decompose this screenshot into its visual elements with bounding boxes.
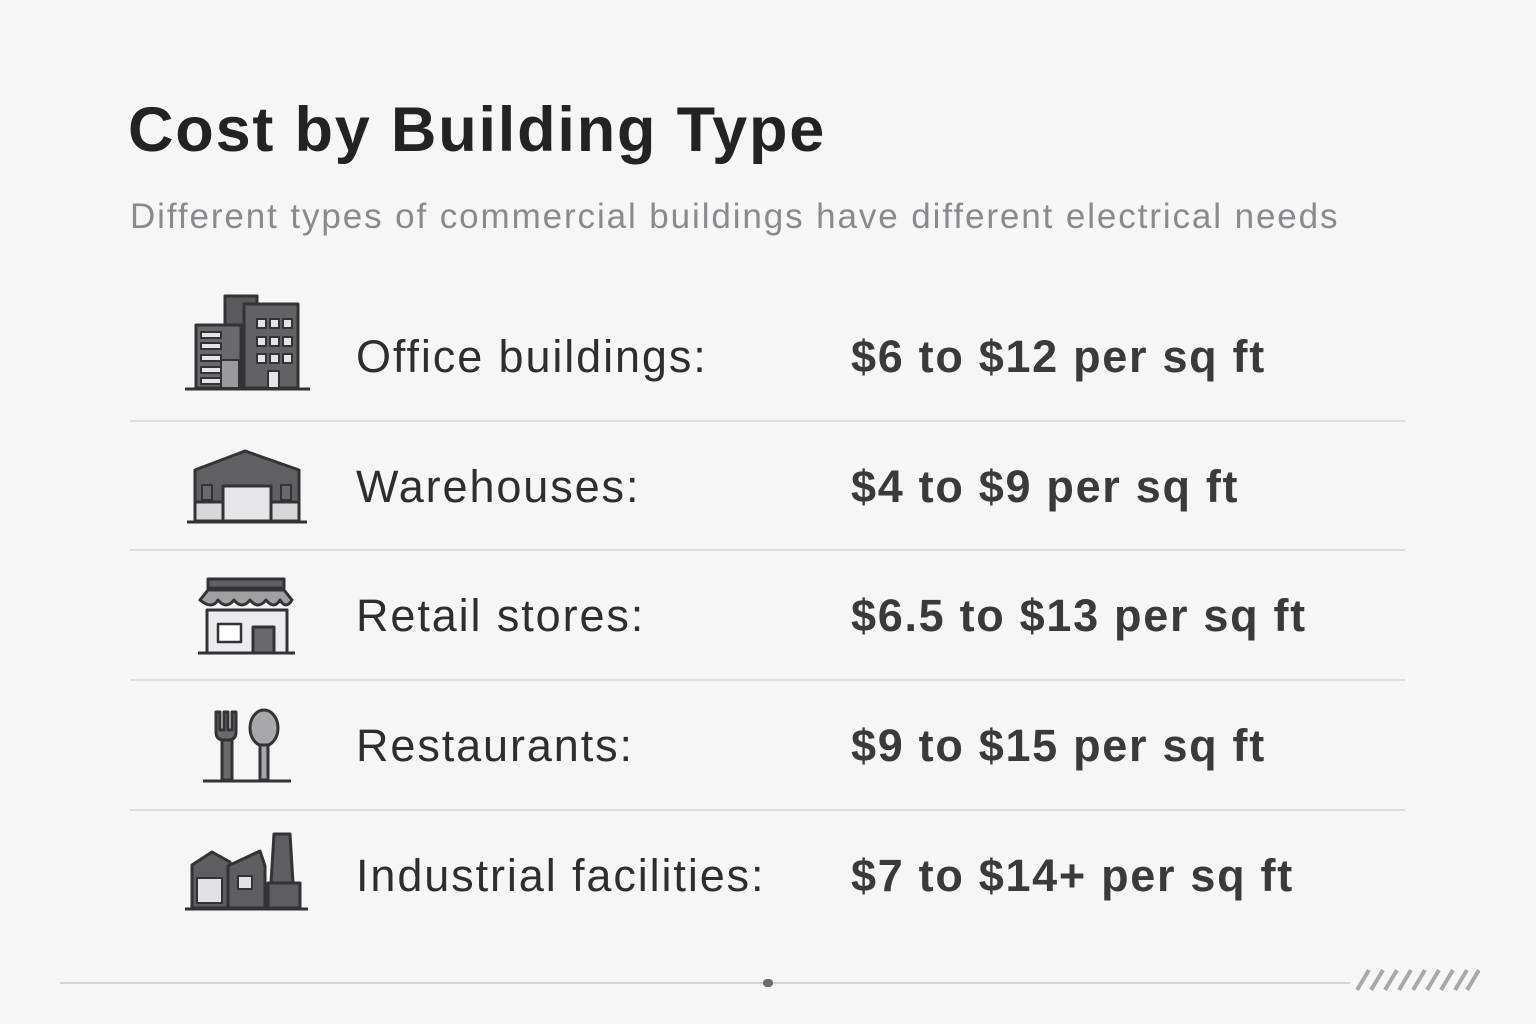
icon: retail store — [198, 579, 295, 653]
subtitle: Different types of commercial buildings have different electrical needs — [130, 197, 1339, 236]
row label: office: Office buildings: — [356, 331, 708, 382]
row price: warehouses: $4 to $9 per sq ft — [851, 461, 1239, 512]
row price: industrial: $7 to $14+ per sq ft — [851, 850, 1294, 901]
row label: industrial: Industrial facilities: — [356, 850, 765, 901]
icon: office building — [185, 296, 310, 389]
row price: retail: $6.5 to $13 per sq ft — [851, 590, 1307, 641]
icon: warehouse — [187, 451, 307, 522]
row label: restaurants: Restaurants: — [356, 720, 634, 771]
footer decoration — [60, 982, 1350, 984]
row label: warehouses: Warehouses: — [356, 461, 640, 512]
row price: office: $6 to $12 per sq ft — [851, 331, 1266, 382]
title: Cost by Building Type — [128, 95, 826, 165]
icon: factory — [185, 834, 308, 909]
row label: retail: Retail stores: — [356, 590, 645, 641]
row price: restaurants: $9 to $15 per sq ft — [851, 720, 1266, 771]
icon: fork and spoon — [203, 710, 291, 781]
